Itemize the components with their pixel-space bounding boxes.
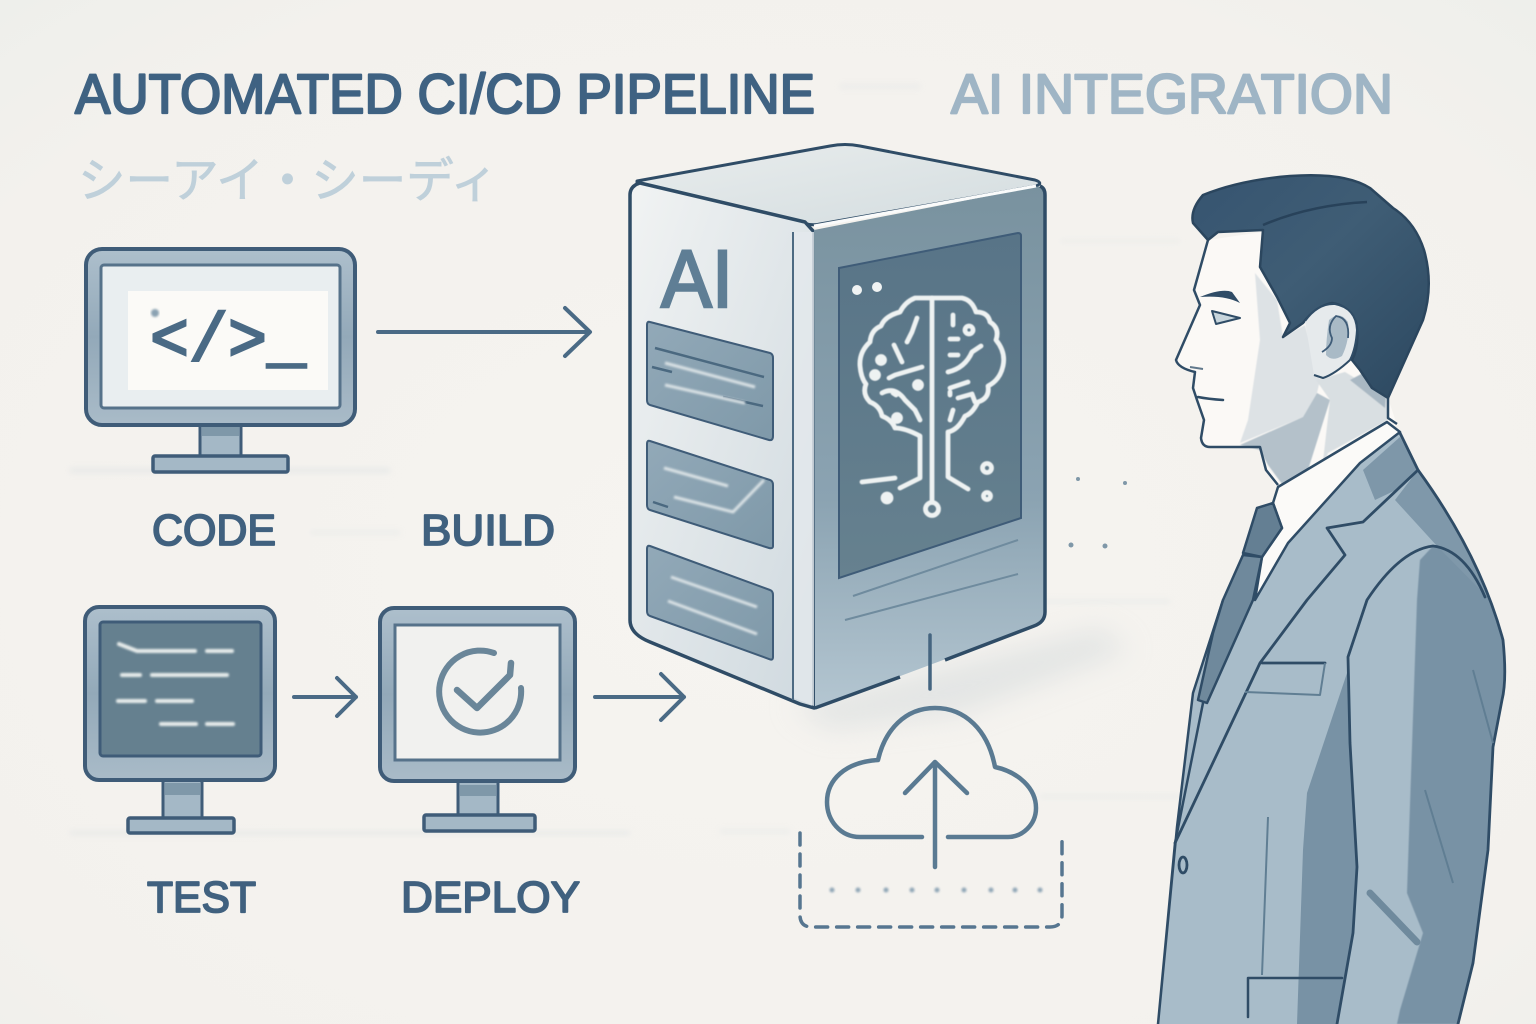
shirt collar	[1255, 422, 1400, 600]
arrow: deploy to AI server	[595, 674, 684, 720]
eyebrow, eye and mouth	[1190, 291, 1240, 400]
AI server tower	[630, 144, 1045, 708]
label: test: TEST	[147, 873, 256, 922]
face and neck	[1176, 232, 1397, 490]
suit jacket	[1158, 433, 1520, 1024]
server panel 1	[647, 322, 773, 440]
server top face	[637, 144, 1040, 225]
left jacket front and edges	[1158, 600, 1252, 1024]
label: deploy: DEPLOY	[401, 873, 580, 922]
server panel 3	[647, 546, 773, 660]
icon: test monitor	[85, 607, 275, 833]
icon: cloud upload	[827, 708, 1036, 867]
heading: AI Integration: AI INTEGRATION	[951, 62, 1393, 125]
hair	[1192, 175, 1429, 398]
necktie	[1198, 503, 1282, 703]
arrow: code to AI server	[378, 308, 590, 356]
label: build: BUILD	[421, 506, 555, 555]
AI lettering on server: AI	[661, 234, 733, 325]
icon: code monitor	[86, 249, 355, 472]
server panel 2	[647, 441, 773, 548]
jacket shadows	[1297, 437, 1520, 1024]
dashed deployment frame	[800, 833, 1062, 927]
title: Automated CI/CD Pipeline: AUTOMATED CI/CD PIPELINE	[75, 62, 815, 125]
connector: server to cloud	[928, 635, 932, 689]
server right face	[814, 186, 1045, 708]
decorative data dots	[1068, 477, 1127, 548]
jacket lines and lapel	[1175, 433, 1505, 1024]
figure: businessman in profile	[1158, 175, 1520, 1024]
Japanese subtitle: シーアイ・シーディ	[78, 155, 498, 208]
icon: brain circuit tree	[860, 298, 1004, 516]
arrow: test to deploy	[294, 678, 356, 716]
ear	[1305, 304, 1357, 378]
server left face	[630, 183, 814, 708]
label: code: CODE	[152, 506, 276, 555]
icon: deploy monitor	[380, 608, 575, 831]
brain screen	[839, 233, 1021, 578]
icon: code monitor: </>_	[150, 304, 306, 381]
